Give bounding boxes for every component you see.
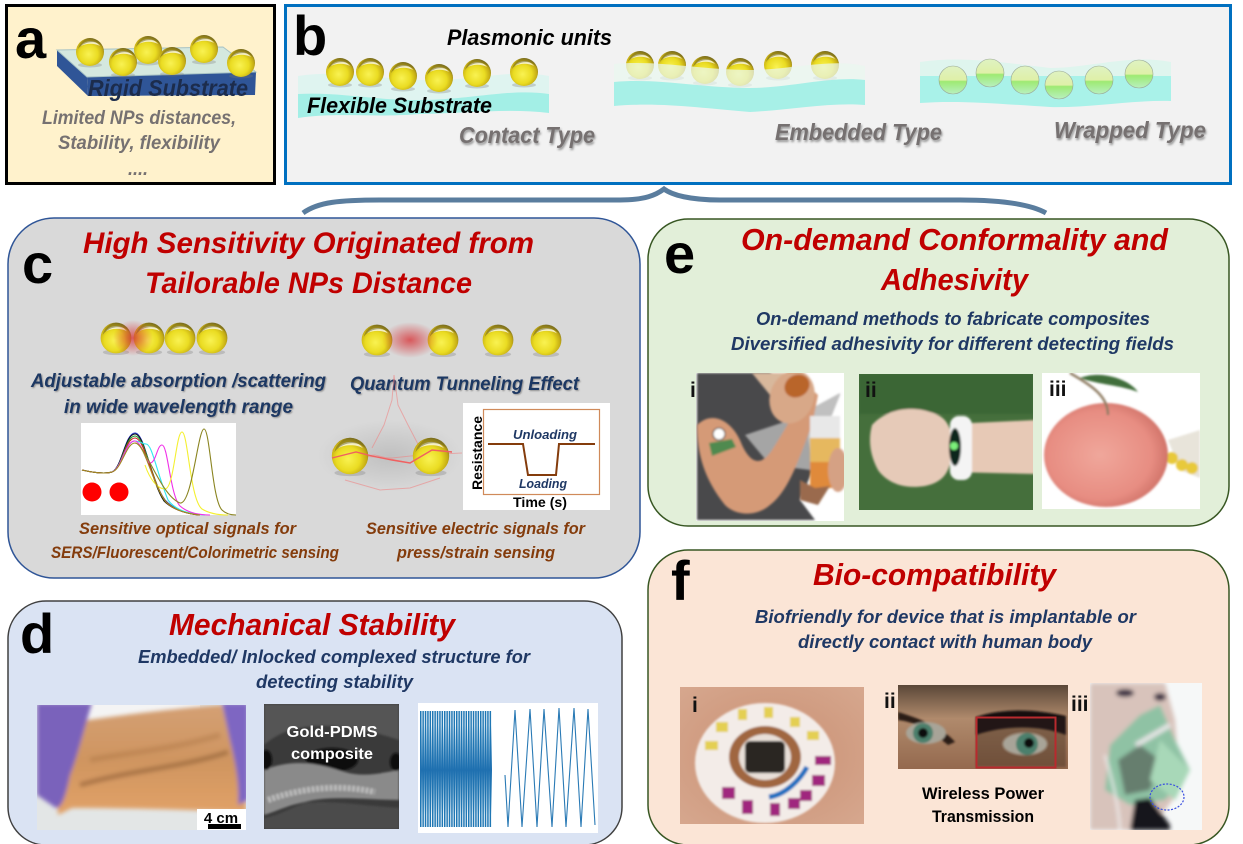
image labels f: ii bbox=[884, 690, 896, 713]
wireless power caption: Transmission bbox=[932, 808, 1034, 826]
image labels f bbox=[692, 690, 1089, 717]
panel f subtitle: Biofriendly for device that is implantable or bbox=[755, 606, 1138, 627]
spectra chart bbox=[81, 423, 236, 515]
photo: stretched composite sheet bbox=[37, 705, 246, 830]
panel f subtitle: directly contact with human body bbox=[798, 631, 1094, 652]
letter f: f bbox=[671, 549, 690, 612]
optical effect caption: Adjustable absorption /scattering bbox=[30, 371, 326, 392]
rigid substrate block bbox=[57, 47, 256, 96]
limitations text bbox=[42, 108, 236, 180]
optical effect caption: in wide wavelength range bbox=[64, 397, 293, 418]
panel d title: Mechanical Stability bbox=[169, 607, 457, 642]
electric signals caption bbox=[366, 520, 587, 562]
panel e title: On-demand Conformality and bbox=[741, 222, 1169, 257]
flexible substrate label: Flexible Substrate bbox=[307, 93, 492, 118]
resistance chart: Resistance bbox=[469, 416, 485, 490]
panel e subtitle: Diversified adhesivity for different detecting fields bbox=[731, 333, 1174, 354]
SEM image label: Gold-PDMS bbox=[286, 724, 378, 741]
resistance chart: Loading bbox=[519, 476, 567, 491]
limitations text: Limited NPs distances, bbox=[42, 108, 236, 129]
panel a: rigid substrate bbox=[6, 6, 274, 184]
optical signals caption: Sensitive optical signals for bbox=[79, 520, 298, 538]
tunneling nanoparticles, right bbox=[362, 322, 561, 358]
photo f-ii: eyes with smart contact lens bbox=[898, 685, 1068, 769]
electric signals caption: Sensitive electric signals for bbox=[366, 520, 587, 538]
letter d: d bbox=[20, 602, 54, 665]
panel c title: High Sensitivity Originated from bbox=[83, 227, 534, 260]
resistance chart bbox=[463, 403, 610, 510]
image labels e bbox=[690, 378, 1067, 402]
contact type label: Contact Type bbox=[459, 122, 595, 148]
panel b: flexible substrate types bbox=[286, 4, 1230, 184]
wrapped type label: Wrapped Type bbox=[1054, 117, 1206, 143]
contact type illustration bbox=[298, 58, 549, 118]
gold nanoparticles on rigid substrate bbox=[76, 35, 255, 78]
rigid substrate label: Rigid Substrate bbox=[88, 75, 248, 101]
panel f subtitle bbox=[755, 606, 1138, 652]
panel f title: Bio-compatibility bbox=[813, 557, 1058, 592]
panel f: bio-compatibility bbox=[648, 549, 1229, 844]
image labels e: i bbox=[690, 379, 696, 402]
embedded type illustration bbox=[614, 51, 865, 112]
optical signals caption bbox=[51, 520, 339, 562]
image labels f: i bbox=[692, 694, 698, 717]
brace linking panel b to panels below bbox=[303, 189, 1046, 213]
panel e title: Adhesivity bbox=[880, 262, 1030, 297]
cycling stability chart bbox=[418, 703, 598, 833]
panel c title: Tailorable NPs Distance bbox=[145, 267, 472, 300]
photo e-iii: apple with sensor bbox=[1042, 373, 1200, 509]
letter b: b bbox=[293, 4, 327, 67]
panel d: mechanical stability bbox=[8, 601, 622, 844]
wireless power caption bbox=[922, 785, 1045, 826]
panel e: conformality and adhesivity bbox=[648, 219, 1229, 526]
limitations text: .... bbox=[128, 159, 148, 180]
photo: stretched composite sheet: 4 cm bbox=[204, 810, 238, 827]
letter c: c bbox=[22, 232, 53, 295]
panel c title bbox=[83, 227, 534, 300]
photo e-ii: wrist band on grass bbox=[859, 374, 1033, 510]
SEM image: gold-PDMS composite bbox=[264, 704, 399, 829]
panel e subtitle: On-demand methods to fabricate composites bbox=[756, 308, 1150, 329]
panel d subtitle: detecting stability bbox=[256, 671, 415, 692]
image labels e: iii bbox=[1049, 378, 1067, 401]
image labels f: iii bbox=[1071, 693, 1089, 716]
letter a: a bbox=[15, 7, 47, 70]
wrapped type illustration bbox=[920, 59, 1171, 107]
letter e: e bbox=[664, 222, 695, 285]
SEM image label bbox=[286, 724, 378, 763]
optical signals caption: SERS/Fluorescent/Colorimetric sensing bbox=[51, 544, 339, 562]
coupled nanoparticles, left bbox=[101, 320, 227, 356]
panel d subtitle bbox=[138, 646, 532, 692]
image labels e: ii bbox=[865, 379, 877, 402]
embedded type label: Embedded Type bbox=[775, 119, 942, 145]
plasmonic units label: Plasmonic units bbox=[447, 25, 612, 50]
panel e subtitle bbox=[731, 308, 1174, 354]
electric signals caption: press/strain sensing bbox=[396, 544, 555, 562]
photo f-iii: oxygen mask sensor bbox=[1090, 683, 1202, 830]
panel d subtitle: Embedded/ Inlocked complexed structure for bbox=[138, 646, 532, 667]
photo e-i: tattoo sensor on arm bbox=[696, 373, 844, 521]
limitations text: Stability, flexibility bbox=[58, 133, 221, 154]
SEM image label: composite bbox=[291, 746, 373, 763]
panel e title bbox=[741, 222, 1169, 297]
quantum tunneling caption: Quantum Tunneling Effect bbox=[350, 374, 580, 395]
wireless power caption: Wireless Power bbox=[922, 785, 1045, 803]
photo f-i: skin-mounted sensor disc bbox=[680, 687, 864, 824]
resistance chart: Time (s) bbox=[513, 494, 567, 510]
resistance chart: Unloading bbox=[513, 427, 577, 442]
panel c: high sensitivity bbox=[8, 218, 640, 578]
electric tunneling illustration bbox=[318, 375, 462, 492]
optical effect caption bbox=[30, 371, 326, 418]
